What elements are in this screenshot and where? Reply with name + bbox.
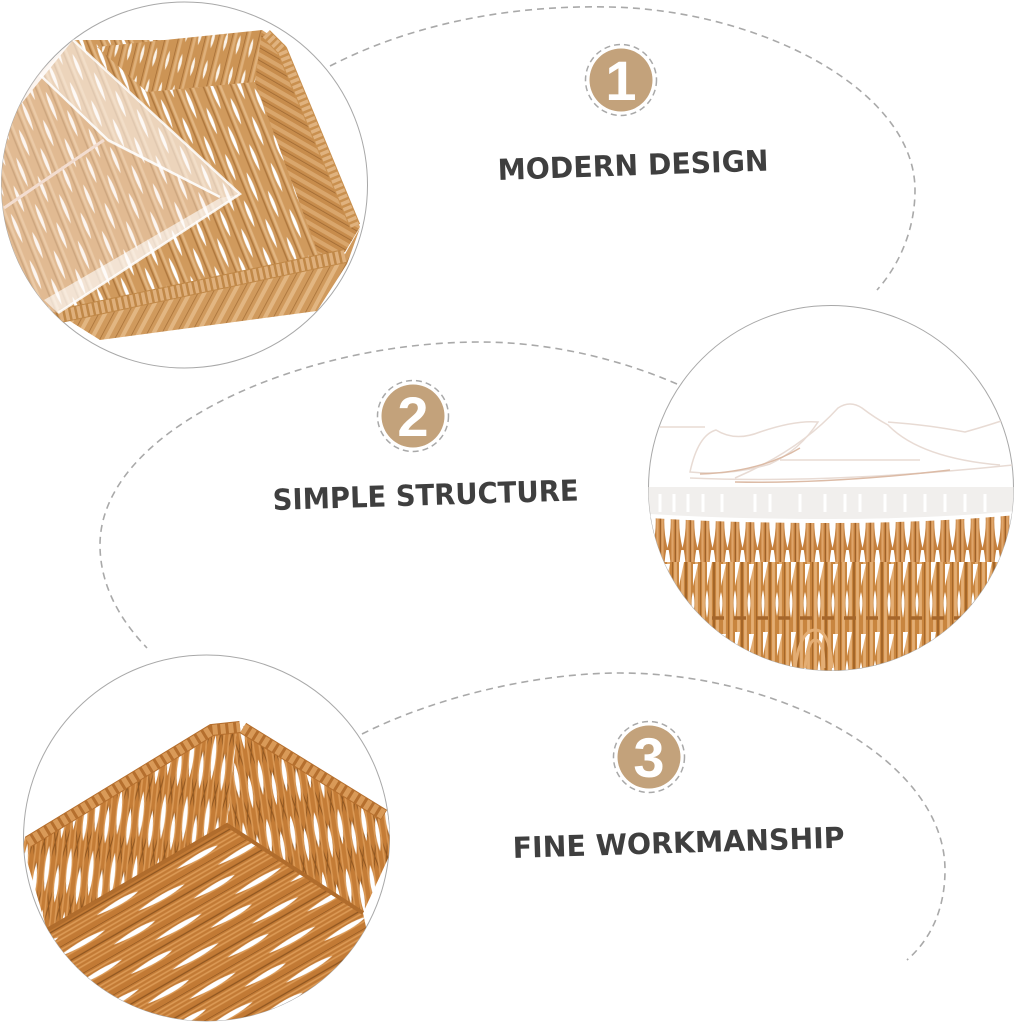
badge: number 1: [586, 44, 656, 116]
lid rim ticks: [660, 494, 985, 512]
badge: number 3: 3: [633, 726, 665, 789]
badge: number 1: 1: [605, 49, 637, 112]
panel: lid edge close-up photo circle: [640, 306, 1017, 675]
basket right wall: [255, 30, 360, 253]
basket front rim: [60, 256, 345, 316]
basket back wall: [97, 30, 272, 92]
badge: number 3: [614, 722, 684, 792]
wall base shadow: [47, 825, 363, 930]
heading: simple structure: SIMPLE STRUCTURE: [272, 473, 579, 517]
lid inner seam: [4, 140, 104, 208]
basket right rim: [266, 34, 355, 226]
lid handles outline: [660, 404, 1013, 479]
badge: number 2: 2: [397, 385, 429, 448]
heading: modern design: MODERN DESIGN: [497, 144, 769, 187]
dashed connector: modern design: [330, 7, 915, 290]
brown weft dashes: [690, 616, 990, 620]
upper wicker row: [640, 515, 1017, 565]
lid rim edge: [650, 513, 1017, 521]
clear lid: [0, 40, 240, 313]
arched strands: [795, 630, 832, 668]
dashed connector: fine workmanship: [362, 673, 945, 960]
lower wicker row: [664, 562, 998, 670]
right wall: [227, 723, 392, 913]
left wall: [23, 723, 238, 930]
lid tint band: [700, 448, 950, 482]
badge: number 2: [378, 380, 448, 452]
lid inner edges: [40, 40, 240, 313]
heading: fine workmanship: FINE WORKMANSHIP: [512, 821, 845, 865]
panel: basket with lid photo circle: [0, 2, 368, 368]
panel: woven corner photo circle: [23, 655, 392, 1024]
left rim: [28, 727, 240, 842]
lid rim band: [645, 487, 1017, 520]
dashed connector: simple structure: [100, 342, 677, 648]
basket floor: [47, 825, 388, 1024]
basket floor: [0, 40, 345, 320]
basket front wall: [57, 228, 360, 340]
lid edge bands: [40, 40, 240, 198]
right rim: [243, 728, 384, 815]
